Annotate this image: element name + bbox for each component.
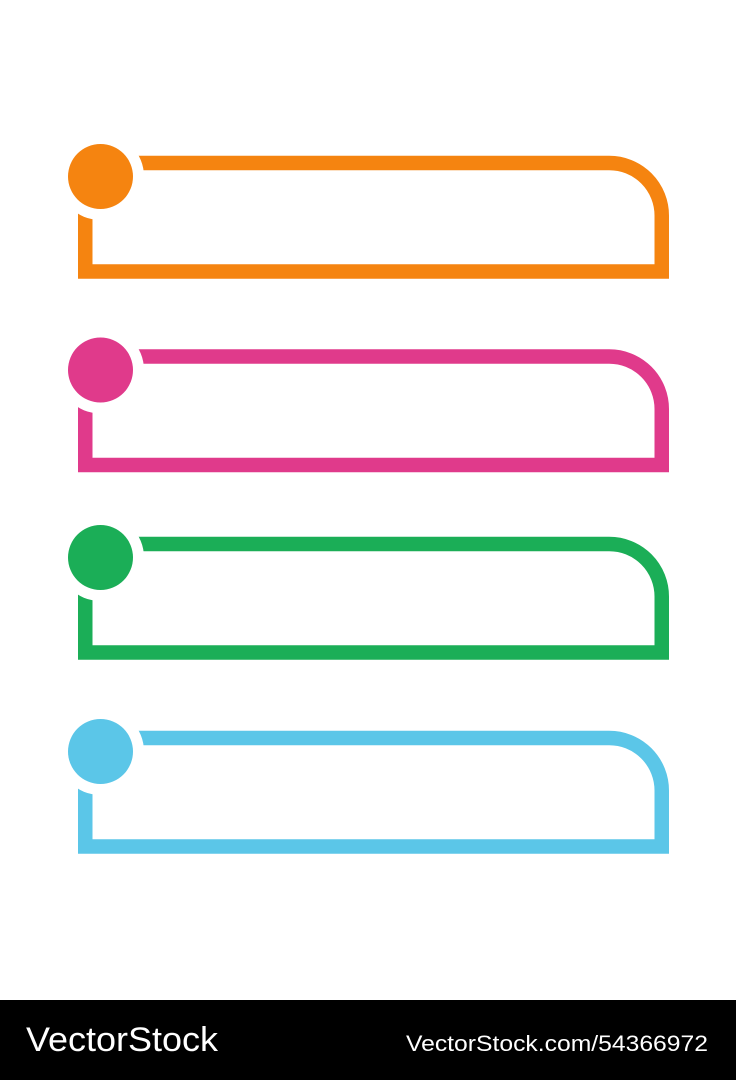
footer logo text: VectorStock <box>26 1021 219 1059</box>
panel: orange banner <box>57 133 662 272</box>
panel: green banner <box>57 514 662 652</box>
footer image id text: VectorStock.com/54366972 <box>406 1031 708 1056</box>
panel: pink banner <box>57 326 662 465</box>
panel: blue banner <box>57 708 662 846</box>
footer bar <box>0 1000 736 1080</box>
